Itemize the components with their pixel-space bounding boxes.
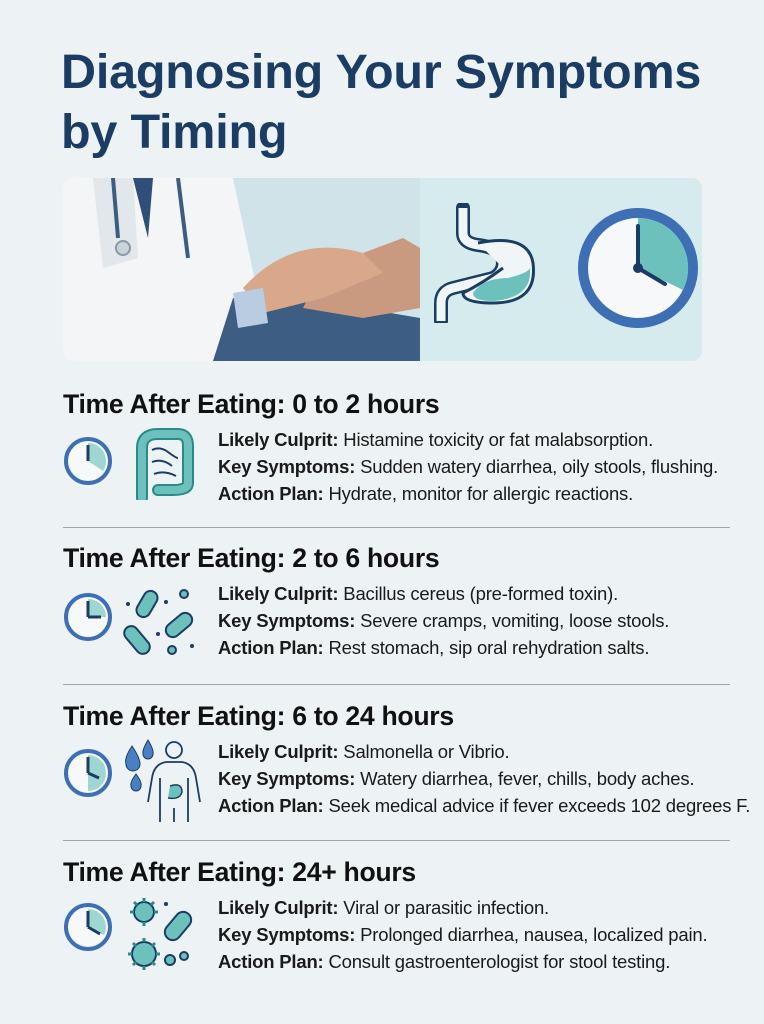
title: by Timing [61, 105, 287, 159]
icon: clock [64, 593, 112, 641]
text block: Likely Culprit: Histamine toxicity or fat malabsorption. [218, 429, 653, 450]
icon: stomach [434, 203, 535, 323]
hero image panel [63, 178, 702, 361]
section: 2 to 6 hours [63, 543, 669, 658]
heading: Time After Eating: 24+ hours [63, 857, 416, 887]
text block: Likely Culprit: Viral or parasitic infection. [218, 897, 549, 918]
icon: water drops and body [125, 739, 201, 822]
text block: Likely Culprit: Salmonella or Vibrio. [218, 741, 509, 762]
heading: Time After Eating: 0 to 2 hours [63, 389, 439, 419]
text block: Key Symptoms: Severe cramps, vomiting, loose stools. [218, 610, 669, 631]
text block [218, 741, 750, 816]
section: 24+ hours [63, 857, 707, 972]
heading: Time After Eating: 6 to 24 hours [63, 701, 454, 731]
text block: Action Plan: Rest stomach, sip oral rehydration salts. [218, 637, 649, 658]
icon: clock [64, 749, 112, 797]
icon: clock [64, 437, 112, 485]
icon: viruses [128, 898, 192, 970]
heading: Time After Eating: 2 to 6 hours [63, 543, 439, 573]
text block: Key Symptoms: Sudden watery diarrhea, oily stools, flushing. [218, 456, 718, 477]
text block: Action Plan: Hydrate, monitor for allergic reactions. [218, 483, 633, 504]
icon: clock [64, 903, 112, 951]
text block [218, 583, 669, 658]
text block: Likely Culprit: Bacillus cereus (pre-formed toxin). [218, 583, 618, 604]
section: 0 to 2 hours [63, 389, 718, 504]
section: 6 to 24 hours [63, 701, 750, 822]
text block: Key Symptoms: Watery diarrhea, fever, chills, body aches. [218, 768, 694, 789]
text block: Action Plan: Seek medical advice if fever exceeds 102 degrees F. [218, 795, 750, 816]
title [61, 45, 701, 159]
title: Diagnosing Your Symptoms [61, 45, 701, 99]
icon: large clock [578, 208, 698, 328]
text block: Action Plan: Consult gastroenterologist for stool testing. [218, 951, 670, 972]
text block [218, 429, 718, 504]
icon: intestines [136, 428, 194, 500]
text block [218, 897, 707, 972]
text block: Key Symptoms: Prolonged diarrhea, nausea, localized pain. [218, 924, 707, 945]
icon: bacteria [123, 589, 194, 655]
photo: doctor holding patient hands [63, 178, 420, 361]
